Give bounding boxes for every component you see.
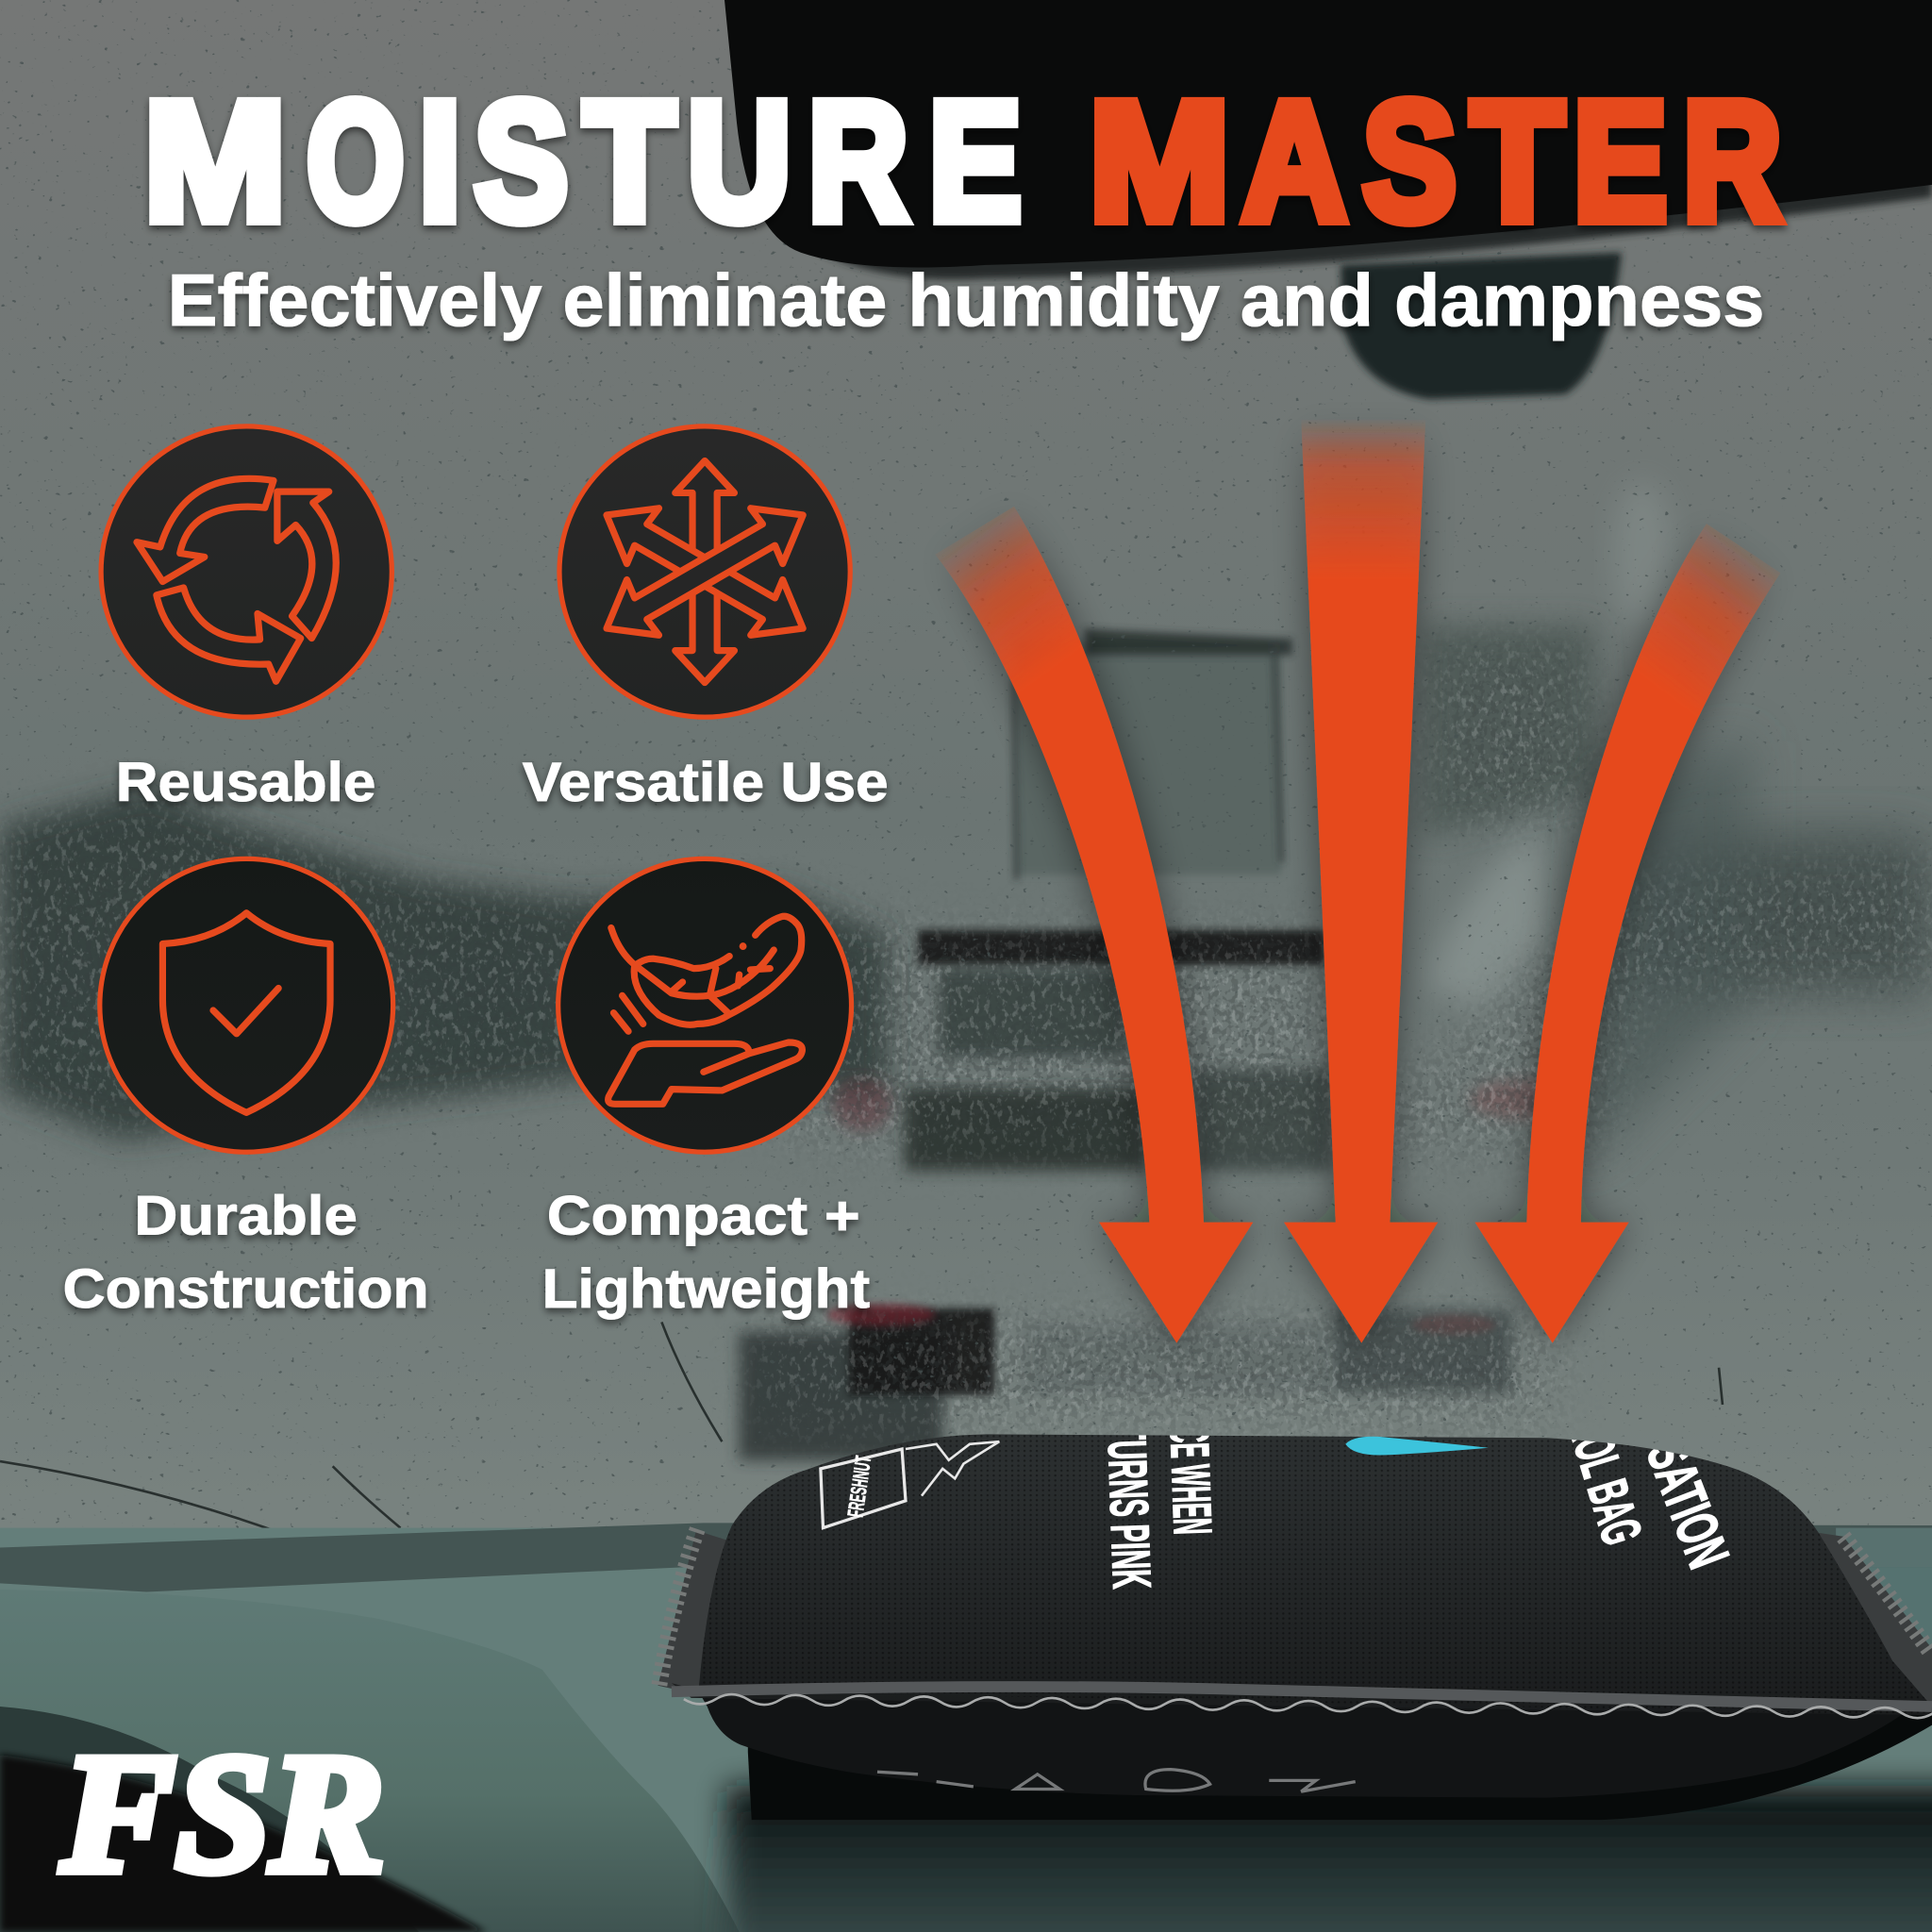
- feature: reusable: [101, 426, 391, 813]
- dashboard base: [0, 1528, 1932, 1932]
- bag printed text: SSATION: [1625, 1410, 1741, 1576]
- logo: FSR: FSR: [60, 1719, 385, 1907]
- feature: durable construction: [63, 858, 429, 1320]
- mirror: [724, 0, 1932, 267]
- icon: shield with check: [100, 858, 393, 1152]
- bag underside icons: [877, 1770, 1356, 1791]
- building frame: [1014, 631, 1291, 880]
- bag printed text: [1095, 1408, 1741, 1590]
- label: compact lightweight: Lightweight: [542, 1258, 870, 1320]
- title: S: [1363, 66, 1457, 255]
- title: S: [475, 66, 568, 255]
- title: R: [1683, 66, 1782, 255]
- label: durable construction: Durable: [134, 1186, 358, 1247]
- dark lower-left dash: [0, 1707, 419, 1932]
- label: reusable: Reusable: [116, 752, 375, 813]
- feature: compact and lightweight: [542, 858, 870, 1320]
- label: durable construction: Construction: [63, 1258, 429, 1320]
- arrow: right curved: [1474, 524, 1780, 1343]
- blurred treeline right: [1629, 834, 1932, 993]
- rain trails: [0, 1322, 1723, 1535]
- icon: six-way arrows: [559, 426, 850, 717]
- bag underside: [702, 1698, 1905, 1798]
- title: A: [1242, 66, 1347, 255]
- mirror stem: [1341, 253, 1622, 399]
- red tail lights: [833, 1077, 892, 1131]
- blue water drop: [1345, 1437, 1489, 1456]
- label: compact lightweight: [542, 1186, 870, 1320]
- dark bands behind arrows: [918, 930, 1324, 965]
- label: versatile use: Versatile Use: [523, 752, 889, 813]
- seam band: [672, 1687, 1932, 1707]
- shadow under bag: [727, 1787, 1932, 1932]
- bag printed text: CE WHEN: [1158, 1425, 1223, 1536]
- label: compact lightweight: Compact +: [547, 1186, 860, 1247]
- black base under bag: [748, 1700, 1932, 1820]
- subtitle: Effectively eliminate humidity and dampness: [168, 258, 1764, 341]
- bag printed text: ROL BAG: [1556, 1408, 1655, 1552]
- title: O: [307, 66, 404, 255]
- bag top face: [672, 1434, 1932, 1715]
- title: R: [808, 66, 908, 255]
- bag logo: [821, 1441, 999, 1528]
- foreground hump: [0, 1590, 740, 1932]
- bag printed text: TURNS PINK: [1095, 1423, 1161, 1590]
- title: E: [929, 66, 1022, 255]
- title: [144, 66, 1782, 255]
- product: desiccant bag: [658, 1408, 1932, 1820]
- title: M: [144, 66, 286, 255]
- icon: feather over hand: [558, 858, 852, 1152]
- raindrop specks: [0, 0, 1932, 1528]
- bag logo: FRESHNUT: [842, 1454, 875, 1519]
- building interior: [1017, 641, 1281, 874]
- bag flaps: [658, 1530, 1932, 1713]
- title: U: [688, 66, 791, 255]
- left teeth: [659, 1529, 697, 1686]
- label: durable construction: [63, 1186, 429, 1320]
- seam wave: [684, 1694, 1932, 1718]
- title: I: [419, 66, 460, 255]
- title: E: [1574, 66, 1667, 255]
- title: T: [584, 66, 675, 255]
- title: T: [1472, 66, 1563, 255]
- blurred treeline left: [0, 789, 887, 1140]
- arrow: centre straight: [1284, 419, 1438, 1343]
- window edge strip: [0, 1523, 1932, 1592]
- haze streaks: [1429, 825, 1546, 1010]
- water texture in dark bands: [0, 642, 1932, 1438]
- arrow: left curved: [935, 507, 1253, 1343]
- mirror rim: [789, 124, 1932, 279]
- feature: versatile use: [523, 426, 889, 813]
- right teeth: [1843, 1537, 1929, 1651]
- icon: recycling arrows: [101, 426, 391, 717]
- title: M: [1090, 66, 1230, 255]
